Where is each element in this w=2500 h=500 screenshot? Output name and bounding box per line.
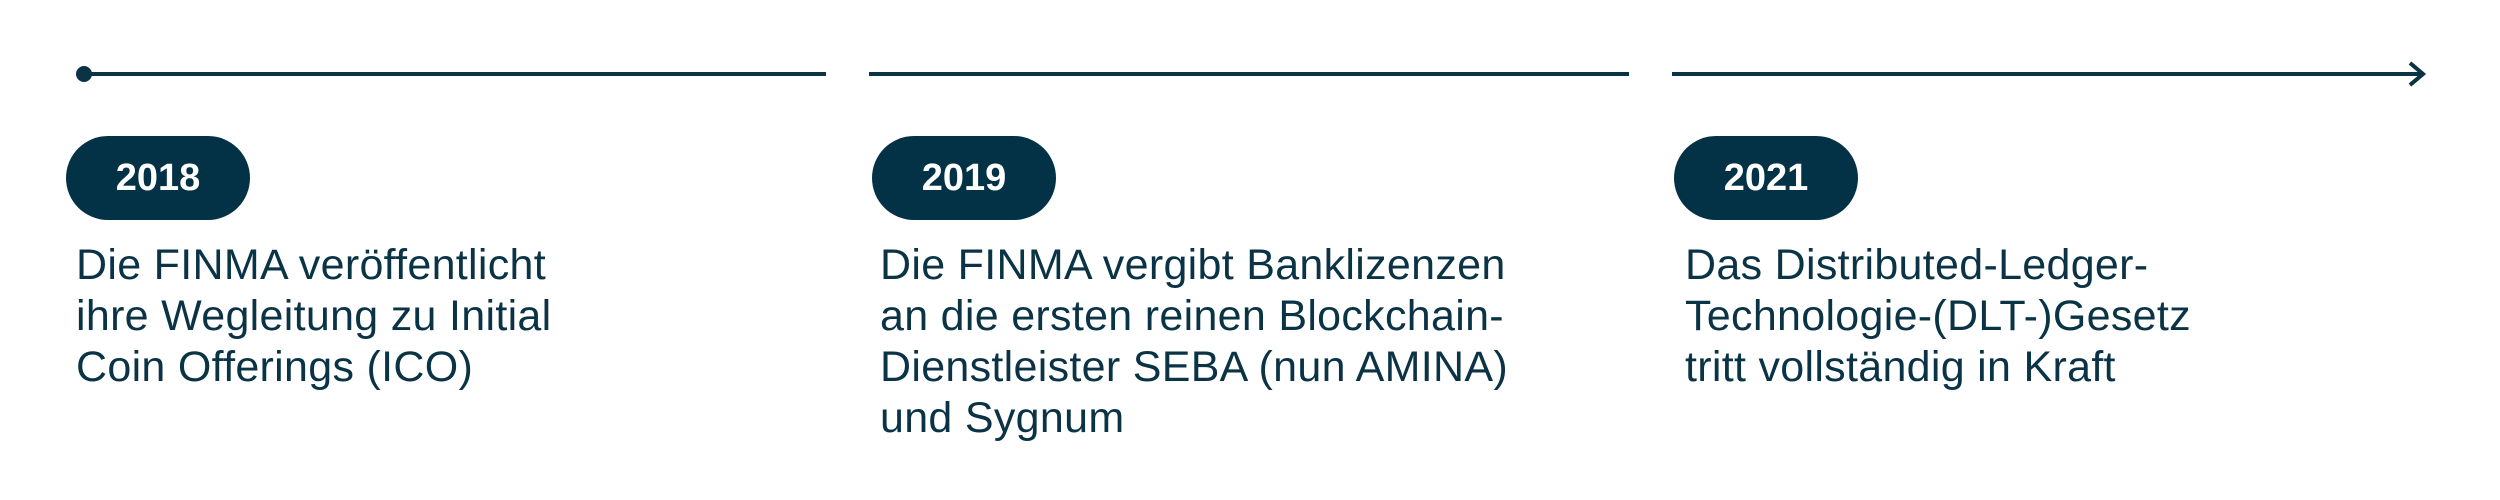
text 2019: an die ersten reinen Blockchain- xyxy=(880,292,1504,340)
year 2021: 2021 xyxy=(1724,157,1808,199)
text 2018: ihre Wegleitung zu Initial xyxy=(76,292,552,340)
text 2021 xyxy=(1685,241,2191,391)
text 2019: Dienstleister SEBA (nun AMINA) xyxy=(880,343,1508,391)
text 2019 xyxy=(880,241,1508,442)
text 2018: Die FINMA veröffentlicht xyxy=(76,241,546,289)
text 2019: und Sygnum xyxy=(880,394,1124,442)
text 2019: Die FINMA vergibt Banklizenzen xyxy=(880,241,1506,289)
text 2021: Technologie-(DLT-)Gesetz xyxy=(1685,292,2191,340)
text 2021: tritt vollständig in Kraft xyxy=(1685,343,2116,391)
year 2019: 2019 xyxy=(922,157,1006,199)
year 2018: 2018 xyxy=(116,157,200,199)
timeline axis xyxy=(76,62,2426,86)
text 2021: Das Distributed-Ledger- xyxy=(1685,241,2148,289)
text 2018 xyxy=(76,241,552,391)
text 2018: Coin Offerings (ICO) xyxy=(76,343,473,391)
year 2018 xyxy=(66,136,250,220)
year 2021 xyxy=(1674,136,1858,220)
year 2019 xyxy=(872,136,1056,220)
